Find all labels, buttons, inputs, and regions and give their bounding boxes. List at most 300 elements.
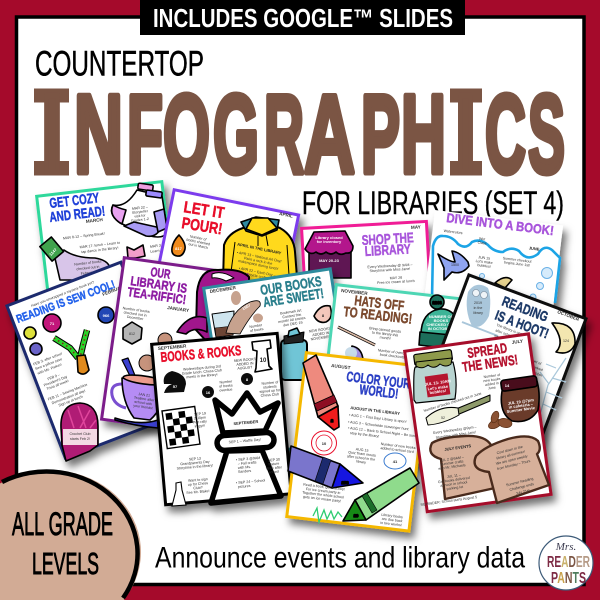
card: May, shop the library xyxy=(302,221,436,395)
July text: added in xyxy=(485,381,499,387)
July text: library all summer! xyxy=(496,450,525,461)
February heading: Have you unwrapped a mystery book yet? xyxy=(31,280,95,308)
September text: Storytime in the library! xyxy=(176,463,213,471)
March text: checked out in xyxy=(76,265,100,271)
logo: Mrs. Reader Pants: PANTS xyxy=(551,570,586,587)
card: July, spread the news: bubbles! xyxy=(429,388,446,395)
December title: ARE SWEET! xyxy=(262,285,325,310)
card: May, shop the library: Library closed xyxy=(315,235,343,240)
icon: pink bow xyxy=(127,245,145,258)
July text: JULY EVENTS xyxy=(444,443,472,452)
September text: – Fall crafts xyxy=(238,460,257,466)
January text: Number of books xyxy=(122,306,150,314)
July text: at noon in school xyxy=(440,480,468,488)
July text: Number of books checked out in June xyxy=(423,391,482,413)
November text xyxy=(369,326,409,359)
December text: month! All entries xyxy=(278,316,306,324)
card: September, books and rooks: SEPTEMBER xyxy=(158,343,187,351)
July text: parking lot xyxy=(446,485,463,491)
icon: scarf and ribbon xyxy=(338,327,375,360)
card: July, spread the news: 52 xyxy=(441,416,445,420)
card: July, spread the news: in cafeteria – xyxy=(508,401,534,410)
icon: students circle: 8 xyxy=(246,377,249,382)
October title xyxy=(493,293,551,341)
icon: checkerboard xyxy=(162,406,200,449)
September title: BOOKS & ROOKS xyxy=(160,342,242,365)
card: July, spread the news: Summer Movie xyxy=(506,405,536,414)
logo: Mrs. Reader Pants xyxy=(539,536,593,590)
icon: yellow button xyxy=(24,327,36,339)
card: July, spread the news: 14 xyxy=(505,383,510,388)
April text: books checked xyxy=(186,238,210,246)
July text xyxy=(420,373,535,507)
card: November, hats off to reading: NOVEMBER xyxy=(341,288,369,296)
icon: butter knife xyxy=(426,395,490,425)
October text: month xyxy=(499,341,510,349)
icon: green crayon xyxy=(343,468,419,521)
card: May, shop the library: MAY 20-23 xyxy=(319,258,340,263)
December text: Bookmark Art xyxy=(280,308,302,316)
July text: Number of xyxy=(483,373,500,379)
January text xyxy=(122,306,171,410)
February heading: READING IS SEW COOL! xyxy=(15,279,117,326)
October text: The library is open xyxy=(496,323,525,337)
June text: JUN 15 xyxy=(478,255,490,261)
icon: bubbles xyxy=(480,268,552,300)
May title: LIBRARY xyxy=(364,240,412,259)
August text: • AUG 3 – Schoolwide scavenger hunt xyxy=(348,420,409,431)
icon: queen chess piece xyxy=(211,393,281,503)
July text: We are open weekly xyxy=(496,454,528,466)
September text: Pep rally xyxy=(193,419,207,425)
September text: NEW BOOKS xyxy=(234,357,257,363)
March text: tap dance in the library! xyxy=(81,246,119,254)
November title xyxy=(343,292,413,327)
July title: THE NEWS! xyxy=(461,351,519,375)
title: infographics: F xyxy=(127,72,163,196)
August text: Read a book, get a scoop! xyxy=(303,483,345,491)
card: July, spread the news: JUL 13: 10AM xyxy=(424,378,452,387)
January text: your friends! xyxy=(133,404,153,410)
October title: IS A HOOT! xyxy=(493,307,551,341)
June text: Watercolors xyxy=(443,229,463,235)
October text: after school each xyxy=(495,328,522,342)
December text: NOVEMBER xyxy=(310,334,332,342)
May title xyxy=(361,229,414,259)
August text: in two weeks! xyxy=(380,521,402,527)
December text: of books xyxy=(250,327,264,333)
April text: out in March xyxy=(188,242,208,250)
November text: book checkouts xyxy=(379,353,405,359)
card: April, let it pour xyxy=(141,190,299,379)
June text: Wet xyxy=(479,237,486,241)
icon: red crayon: 2 xyxy=(331,418,334,423)
July text: Cool down in the xyxy=(496,445,523,455)
August text: Number of new books xyxy=(381,442,416,450)
September text: • SEP 24 – School xyxy=(236,478,266,485)
icon: grey gem: 812 xyxy=(129,332,135,336)
March text: Number of books xyxy=(74,259,102,267)
icon: blue fish: 1500 xyxy=(451,263,459,267)
June title: DIVE INTO A BOOK! xyxy=(446,210,555,238)
September text: Nature xyxy=(268,462,279,466)
February text: Trivia all week! xyxy=(46,379,69,391)
July text: Summer crafts xyxy=(440,459,464,467)
March text: MAR 17: lunch – Learn to xyxy=(79,241,120,249)
card: January, our library is tea-riffic xyxy=(102,258,249,436)
card: May, shop the library: for inventory xyxy=(317,239,342,244)
title: infographics: H xyxy=(401,72,446,196)
May text: MAY 26 xyxy=(390,276,402,280)
October text: books checked xyxy=(519,360,543,372)
April title xyxy=(180,199,226,238)
December text: Number xyxy=(249,323,263,329)
icon: purple crayon xyxy=(288,446,363,488)
badge: all grade levels: LEVELS xyxy=(32,546,99,581)
February heading xyxy=(15,279,127,326)
February text: FEB 3: after school xyxy=(33,352,63,366)
March text: Grades 1-2 xyxy=(131,217,149,223)
icon: yarn ball: Crochet Club xyxy=(70,432,90,436)
card: March, get cozy and read: 1147 xyxy=(48,247,58,257)
icon: rook with number xyxy=(252,340,272,372)
icon: bread slices xyxy=(430,436,549,503)
icon: orange rain drop: 817 xyxy=(175,246,183,251)
card: July, spread the news: JUL 19 @7pm xyxy=(507,397,535,406)
August text: are due back xyxy=(382,517,403,523)
icon: teal jar xyxy=(281,328,307,380)
April title: POUR! xyxy=(180,215,224,238)
icon: shop storefront xyxy=(305,231,353,278)
July text: Challenge ends xyxy=(509,482,535,492)
title: infographics: N xyxy=(74,72,123,196)
September text: school xyxy=(269,470,279,474)
March text: February xyxy=(81,270,95,276)
July text: JUL 11 – xyxy=(447,473,461,479)
July text: JUL 2 @9AM – xyxy=(440,455,464,463)
April text: APRIL IN THE LIBRARY xyxy=(237,242,282,256)
June text: JUNE xyxy=(529,245,540,252)
card: July, spread the news: Let's make xyxy=(427,384,449,391)
January text: overdue xyxy=(155,357,169,363)
September text: • SEP 3 @9AM xyxy=(236,456,260,462)
August text: For ice cream party in xyxy=(306,487,341,495)
October text: out in September xyxy=(516,364,544,378)
April text: Paint a rock in the xyxy=(244,256,273,266)
icon: jam jar xyxy=(413,349,456,403)
September text: SEP 1 – Waffle Day! xyxy=(229,438,261,444)
title: infographics: A xyxy=(304,72,355,196)
December text xyxy=(249,308,332,342)
May title: SHOP THE xyxy=(361,229,414,248)
icon: blue fish xyxy=(438,251,469,280)
icon: small pawn xyxy=(172,482,186,506)
July text: from Monday – Thurs xyxy=(497,459,531,471)
icon: owl: in the xyxy=(474,306,482,310)
January text: JAN 21 xyxy=(138,392,150,398)
January text: of books xyxy=(155,353,169,359)
July text: REMINDER: School starts August 5 xyxy=(420,495,477,507)
title: infographics: S xyxy=(528,72,565,196)
February text: President's Day xyxy=(43,375,68,387)
August text: library xyxy=(356,459,366,465)
title: infographics: P xyxy=(361,72,400,196)
icon: teapot xyxy=(177,270,249,345)
July text: June xyxy=(488,385,496,391)
September text: signed up for xyxy=(259,388,281,394)
January title: OUR xyxy=(150,264,172,282)
card: December, our books are sweet xyxy=(204,269,356,458)
August text: AUG 15 xyxy=(356,447,369,453)
icon: teacup and saucer xyxy=(112,358,166,428)
May text: Storytime with Miss Jane! xyxy=(369,267,410,273)
December text: due DEC 19 xyxy=(283,321,303,327)
February text: Demonstration all day! xyxy=(51,389,86,405)
card: November, hats off to reading: CHECKED OUT xyxy=(426,322,456,327)
August text: • AUG 12 – Back to School Night – Be sure to xyxy=(348,426,420,439)
icon: students circle xyxy=(241,373,253,385)
September text: ADDED IN xyxy=(236,361,254,367)
card: November, hats off to reading: NUMBER OF xyxy=(429,314,454,319)
September text: See Mr. Blake! xyxy=(186,489,210,495)
icon: orange rain drop xyxy=(172,235,185,256)
card: July, spread the news: JULY xyxy=(511,338,523,345)
icon: purple crayon: 258 xyxy=(342,480,349,485)
January text: December xyxy=(127,315,144,321)
January text: Number xyxy=(157,349,171,355)
card: January, our library is tea-riffic: JANUARY xyxy=(167,305,189,313)
July text: Every Wednesday @9pm – xyxy=(433,425,477,435)
card: October, reading is a hoot: OCTOBER xyxy=(557,309,580,322)
icon: yellow fish xyxy=(495,278,512,288)
icon: black knight xyxy=(164,371,186,393)
badge: all grade levels xyxy=(0,470,141,600)
August text: stop by the library! xyxy=(350,431,380,438)
heading: countertop: COUNTERTOP xyxy=(35,44,204,84)
icon: yellow raincoat xyxy=(223,217,298,290)
December text: NEW BOOKS xyxy=(309,326,332,334)
January text: checked out in xyxy=(123,310,147,318)
icon: green zipper xyxy=(54,330,89,374)
March text: MAR 3 – xyxy=(150,243,164,249)
card: April, let it pour: APRIL xyxy=(279,211,293,219)
icon: blue scribble around number xyxy=(384,453,406,469)
March text: Learn to xyxy=(150,248,164,254)
September text: Want to sign xyxy=(188,477,208,483)
icon: blue button: 966 xyxy=(103,313,110,318)
July text: with Mr. Michaels xyxy=(438,463,466,471)
icon: black knight: 57 xyxy=(173,384,178,389)
August text: added to school card xyxy=(380,446,414,454)
icon: striped sock xyxy=(40,237,110,280)
September text: pictures xyxy=(238,484,251,489)
February text: Sew a pillow case xyxy=(35,357,63,371)
card: March, get cozy and read: MARCH xyxy=(86,217,104,224)
February text xyxy=(33,352,88,408)
icon: white sock xyxy=(112,183,167,237)
April text: • APR 13 – National Art Day! xyxy=(237,251,282,264)
October title: READING xyxy=(500,293,551,325)
icon: red crayon xyxy=(303,355,339,430)
September text: Grade lunch: Chess Club xyxy=(182,368,222,376)
March title xyxy=(48,189,106,225)
April text: Upcycle crafts xyxy=(245,272,268,280)
April text: • APR 22 – Earth Day – xyxy=(238,266,276,278)
May text xyxy=(367,263,415,285)
July title xyxy=(461,340,519,375)
September text: SEPTEMBER xyxy=(233,419,259,426)
card: July, spread the news xyxy=(405,334,551,512)
logo: Mrs. Reader Pants: Mrs. xyxy=(555,541,576,553)
icon: dark jam jar xyxy=(500,376,539,422)
icon: pink heart candy: 8 xyxy=(322,313,325,318)
January text: school with xyxy=(134,400,152,406)
September text: SEP 13 xyxy=(189,456,201,462)
March text: Storyteller xyxy=(132,209,149,215)
July title: SPREAD xyxy=(466,340,508,361)
August text: • AUG 1 – First Day! Library is open! xyxy=(349,413,407,424)
December text: ADDED IN xyxy=(312,331,330,337)
May text: Every Wednesday @ 9AM – xyxy=(367,263,413,269)
card: August, color your world: AUGUST xyxy=(331,363,351,370)
September text: SEP 30 xyxy=(268,457,280,463)
title: infographics: R xyxy=(264,72,304,196)
November text: month! xyxy=(379,335,391,341)
March text xyxy=(63,205,164,276)
card: March, get cozy and read xyxy=(37,182,182,364)
September text: Number of xyxy=(261,380,278,386)
icon: pouring syrup splash xyxy=(226,291,263,334)
September text: Number xyxy=(219,379,233,385)
September text xyxy=(176,357,283,495)
card: May, shop the library: MAY xyxy=(411,224,421,230)
March text: MAR 22 – xyxy=(132,205,148,211)
February text: FEB 9 – xyxy=(47,373,60,381)
card: November, hats off to reading: BOOKS xyxy=(434,318,449,323)
January title: TEA-RIFFIC! xyxy=(127,284,187,307)
tagline: Announce events and library data xyxy=(155,542,525,574)
June text: Let's make xyxy=(475,259,493,265)
September text: AUGUST xyxy=(237,365,253,371)
June text xyxy=(443,229,540,269)
September text: 2:30pm xyxy=(194,415,206,421)
September text: with Ms. xyxy=(238,465,251,470)
January title xyxy=(127,264,188,307)
February text: Sign up at lunch xyxy=(58,395,83,408)
card: October, reading is a hoot xyxy=(410,275,586,475)
card: August, color your world xyxy=(287,353,428,531)
October text: week during the xyxy=(494,334,519,346)
September text: overdue xyxy=(219,387,233,393)
September text: Sanders xyxy=(238,469,252,474)
icon: pecans xyxy=(487,410,513,431)
icon: overdue circle xyxy=(202,386,214,398)
December text: Contest this xyxy=(282,313,302,319)
card: September, books and rooks xyxy=(152,333,291,506)
September text: students xyxy=(263,384,277,390)
September text: Grandparents Day xyxy=(180,460,210,466)
August text: Library books xyxy=(381,513,403,519)
icon: blue scribble around number: 41 xyxy=(393,459,398,464)
July text: Storytime with Miss Jane! xyxy=(435,430,476,440)
icon: green signature scribble xyxy=(313,508,342,522)
September text: of books xyxy=(219,383,233,389)
icon: cookies xyxy=(139,333,172,371)
card: February, reading is sew cool xyxy=(7,262,179,461)
March text: MAR 8-12 – Spring Break! xyxy=(63,232,105,240)
icon: rook with number: 10 xyxy=(260,358,267,364)
icon: pink button: 71 xyxy=(50,321,55,326)
icon: red scribble around number xyxy=(312,431,336,455)
icon: blue button xyxy=(98,307,114,323)
November title: HATS OFF xyxy=(354,292,405,314)
June text: bubbles! xyxy=(477,263,491,269)
September text: Club? xyxy=(193,486,203,490)
February text: FEB 11 – Sewing Machine xyxy=(47,383,88,401)
September text: meets in the library! xyxy=(186,373,218,379)
water wave and side edges xyxy=(432,236,560,303)
June text: Summer checkout xyxy=(503,256,532,264)
title: infographics: O xyxy=(163,72,210,196)
card: November, hats off to reading: IN OCTOBER! xyxy=(428,326,454,331)
December title: OUR BOOKS xyxy=(259,273,323,298)
March title: GET COZY xyxy=(48,189,100,211)
December title xyxy=(259,273,325,310)
August text: Quiz Team meets xyxy=(348,450,376,458)
September text: up for Chess xyxy=(188,481,208,487)
August text xyxy=(302,405,420,527)
April text xyxy=(186,234,282,280)
icon: crescent moon xyxy=(552,323,575,353)
July text: July 21st xyxy=(515,488,530,496)
icon: crescent moon: 124 xyxy=(563,339,569,343)
title: infographics: G xyxy=(213,72,259,196)
August title xyxy=(346,368,411,402)
October text xyxy=(494,323,544,378)
banner: includes Google Slides xyxy=(140,0,465,35)
icon: knit hat: 1244 xyxy=(433,300,442,305)
July text: new books xyxy=(483,377,501,383)
June text: begins June 1st! xyxy=(504,260,530,268)
August title: COLOR YOUR xyxy=(346,368,411,392)
January title: LIBRARY IS xyxy=(130,273,188,296)
April text: Number of xyxy=(190,234,207,242)
title: infographics: I xyxy=(455,72,476,196)
icon: overdue circle: 16 xyxy=(206,390,211,395)
September text: Chess Club xyxy=(260,392,279,398)
banner: includes Google Slides: INCLUDES GOOGLE™ SLIDES xyxy=(153,5,453,33)
June text: Class xyxy=(477,240,487,246)
card: June, dive into a book xyxy=(415,210,563,389)
icon: owl xyxy=(462,285,498,336)
icon: pink heart candy xyxy=(314,306,331,322)
icon: bare tree branches xyxy=(540,358,566,415)
icon: glass of milk xyxy=(212,311,234,337)
title: infographics: I xyxy=(41,72,63,196)
August text: gets an ice cream party! xyxy=(303,495,341,503)
February text: with Ms. Parker! xyxy=(37,363,62,376)
November title: TO READING! xyxy=(343,303,413,327)
September text: Wednesdays during 3rd xyxy=(183,364,221,372)
April text: makerspace during lunch! xyxy=(238,259,279,271)
icon: owl: 2019 xyxy=(474,301,482,305)
logo: Mrs. Reader Pants: READER xyxy=(547,554,590,571)
February heading: FEBRUARY xyxy=(102,283,127,297)
July text: Get books delivered xyxy=(438,476,470,484)
April title: LET IT xyxy=(182,199,226,222)
icon: yarn ball xyxy=(61,403,98,461)
card: December, our books are sweet: DECEMBER xyxy=(209,285,237,294)
